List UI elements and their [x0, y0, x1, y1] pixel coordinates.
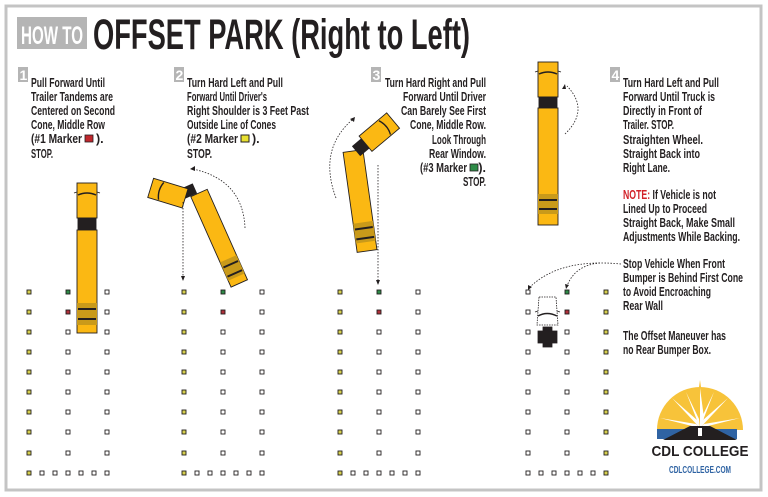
step 1 text: 1 [20, 67, 28, 83]
truck outline panel 4 [535, 297, 560, 347]
step 3 text: (#3 Marker [420, 161, 467, 175]
step 2 text: Turn Hard Left and Pull [187, 76, 283, 90]
title: HOW TO [21, 22, 83, 50]
stop vehicle text [623, 257, 743, 313]
step 1 text: Trailer Tandems are [31, 90, 113, 104]
logo [652, 380, 748, 476]
step 4 text: Straighten Wheel. [623, 133, 703, 147]
step 2 text: Forward Until Driver's [187, 90, 267, 104]
step 1 text: STOP. [31, 147, 53, 161]
step 3 text: Forward Until Driver [403, 90, 486, 104]
step 4 text: Straight Back into [623, 147, 700, 161]
step 3 text: Look Through [432, 133, 486, 147]
step 2 text: Outside Line of Cones [187, 118, 276, 132]
step 3 text: Can Barely See First [401, 104, 487, 118]
step 2 text: Right Shoulder is 3 Feet Past [187, 104, 310, 118]
step 2 text: ). [252, 132, 260, 146]
step 3 text: ). [478, 161, 486, 175]
panel 4 cones [526, 290, 608, 475]
stop vehicle text: Rear Wall [623, 299, 663, 313]
step 4 text: Right Lane. [623, 161, 670, 175]
logo: CDL COLLEGE [652, 443, 748, 460]
step 1 text [18, 67, 115, 161]
step 2 text: STOP. [187, 147, 212, 161]
truck 4 [535, 62, 561, 225]
panel 3 cones [338, 290, 420, 475]
truck 2 [148, 178, 247, 287]
step 2 text: (#2 Marker [187, 132, 238, 146]
note text [623, 188, 740, 244]
step 4 text: Directly in Front of [623, 104, 703, 118]
title: OFFSET PARK (Right to Left) [93, 11, 470, 59]
offset note text: The Offset Maneuver has [623, 329, 726, 343]
arrows [183, 86, 621, 287]
truck 1 [74, 183, 100, 333]
panel 1 cones [27, 290, 109, 475]
note text: NOTE: If Vehicle is not [623, 188, 717, 202]
step 1 text: (#1 Marker [31, 132, 82, 146]
logo: CDLCOLLEGE.COM [669, 464, 731, 476]
step 3 text: Cone, Middle Row. [410, 118, 486, 132]
step 2 text: 2 [176, 67, 184, 83]
stop vehicle text: Stop Vehicle When Front [623, 257, 726, 271]
step 3 text: Turn Hard Right and Pull [385, 76, 486, 90]
step 4 text: Trailer. STOP. [623, 118, 674, 132]
step 3 text: 3 [372, 67, 380, 83]
step 3 text: Rear Window. [429, 147, 486, 161]
step 1 text: Pull Forward Until [31, 76, 105, 90]
truck 3 [343, 113, 400, 252]
step 3 text: STOP. [463, 175, 486, 189]
offset note text [623, 329, 726, 357]
panel 2 cones [182, 290, 264, 475]
step 4 text: Forward Until Truck is [623, 90, 715, 104]
step 1 text: Centered on Second [31, 104, 115, 118]
title [17, 11, 470, 59]
step 1 text: ). [96, 132, 104, 146]
offset note text: no Rear Bumper Box. [623, 343, 711, 357]
step 4 text: 4 [612, 67, 620, 83]
stop vehicle text: to Avoid Encroaching [623, 285, 711, 299]
note text: Lined Up to Proceed [623, 202, 707, 216]
step 2 text [174, 67, 310, 161]
step 3 text [371, 67, 487, 189]
step 4 text: Turn Hard Left and Pull [623, 76, 719, 90]
step 4 text [610, 67, 719, 175]
step 1 text: Cone, Middle Row [31, 118, 105, 132]
cones [27, 290, 608, 475]
